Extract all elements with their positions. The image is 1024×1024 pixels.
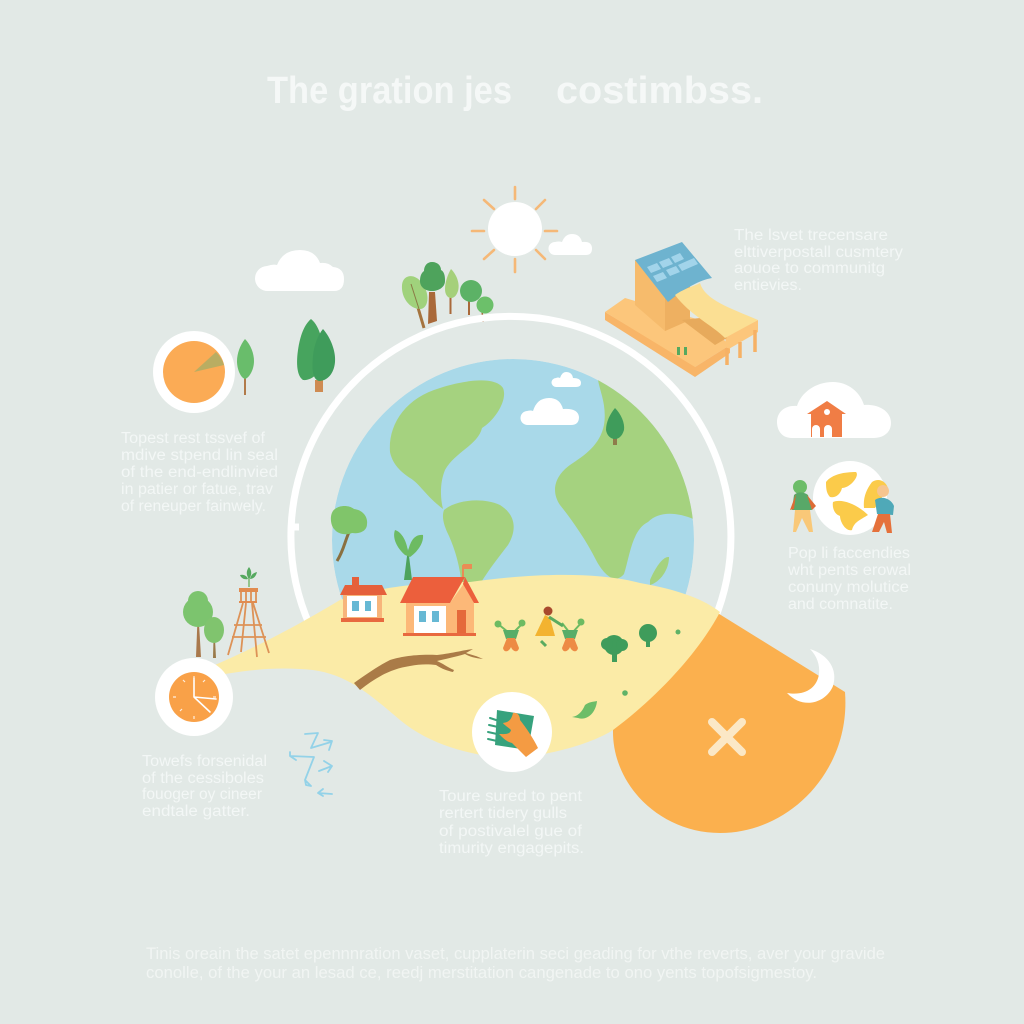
icon: green leaf	[572, 701, 597, 719]
land: north america	[390, 380, 504, 509]
icon: clock badge	[155, 658, 233, 736]
text block: clock: Towefs forsenidal	[142, 753, 267, 770]
text block: bottom center: timurity engagepits.	[439, 840, 584, 857]
text block: right: wht pents erowal	[787, 562, 911, 579]
land: south america	[443, 500, 514, 588]
text block: right: and comnatite.	[788, 596, 893, 613]
text block: bottom center: rertert tidery gulls	[439, 805, 567, 822]
icon: orange pie badge	[153, 331, 235, 413]
icon: globe clouds	[520, 372, 581, 425]
globe	[332, 359, 694, 600]
icon: water tower	[228, 567, 269, 657]
title	[267, 70, 763, 112]
text block: left: Topest rest tssvef of	[121, 430, 266, 447]
text block: left: mdive stpend lin seal	[121, 447, 278, 464]
sand hill	[208, 575, 720, 758]
text block: clock: of the cessiboles	[142, 770, 264, 787]
title: The gration jes	[267, 70, 512, 112]
text block: left: of the end-endlinvied	[121, 464, 278, 481]
text block: top right: entievies.	[734, 277, 802, 294]
text block: bottom center: of postivalel gue of	[439, 823, 583, 840]
text block: left: in patier or fatue, trav	[121, 481, 273, 498]
text block: top right	[734, 227, 903, 294]
icon: globe tree	[606, 408, 624, 445]
footer text: conolle, of the your an lesad ce, reedj merstitation cangenade to ono yents topofsigmestoy.	[146, 963, 817, 982]
icon: blue arrows	[290, 733, 332, 796]
text block: right: conuny molutice	[788, 579, 909, 596]
text block: clock: fouoger oy cineer	[142, 786, 262, 803]
text block: clock: endtale gatter.	[142, 803, 250, 820]
icon: small house	[340, 577, 387, 622]
ring	[291, 316, 731, 626]
text block: right	[787, 545, 911, 613]
orange shape	[613, 612, 845, 833]
footer text: Tinis oreain the satet epennnration vaset, cupplaterin seci geading for vthe reverts, aver your gravide	[146, 944, 885, 963]
icon: fallen branch	[354, 649, 483, 690]
text block: top right: aouoe to communitg	[734, 260, 885, 277]
icon: dark green trees	[297, 319, 335, 392]
footer text	[146, 944, 885, 982]
icon: moon	[787, 649, 834, 703]
text block: right: Pop li faccendies	[788, 545, 910, 562]
icon: notebook badge	[472, 692, 552, 772]
icon: leaf tree	[237, 339, 254, 395]
text block: top right: elttiverpostall cusmtery	[734, 244, 903, 261]
trees on globe	[331, 506, 423, 580]
icon: small cloud	[548, 234, 592, 255]
icon: sun	[472, 187, 557, 272]
text block: bottom center	[439, 788, 584, 857]
icon: large cloud	[255, 250, 344, 291]
icon: large house	[400, 564, 479, 636]
icon: cloud with house	[777, 382, 891, 438]
text block: clock	[142, 753, 267, 820]
text block: left: of reneuper fainwely.	[121, 498, 266, 515]
title: costimbss.	[556, 70, 763, 112]
icon: people with globe	[790, 461, 894, 535]
land: eastern continent	[555, 380, 693, 578]
text block: top right: The lsvet trecensare	[734, 227, 888, 244]
icon: green shrubs	[601, 624, 680, 696]
text block: left	[121, 430, 278, 515]
icon: gardening person and plants	[494, 606, 584, 651]
icon: solar workshop	[605, 242, 758, 377]
icon: two trees by tower	[183, 591, 224, 658]
icon: cross	[712, 722, 742, 752]
text block: bottom center: Toure sured to pent	[439, 788, 583, 805]
trees on ring	[402, 262, 494, 328]
